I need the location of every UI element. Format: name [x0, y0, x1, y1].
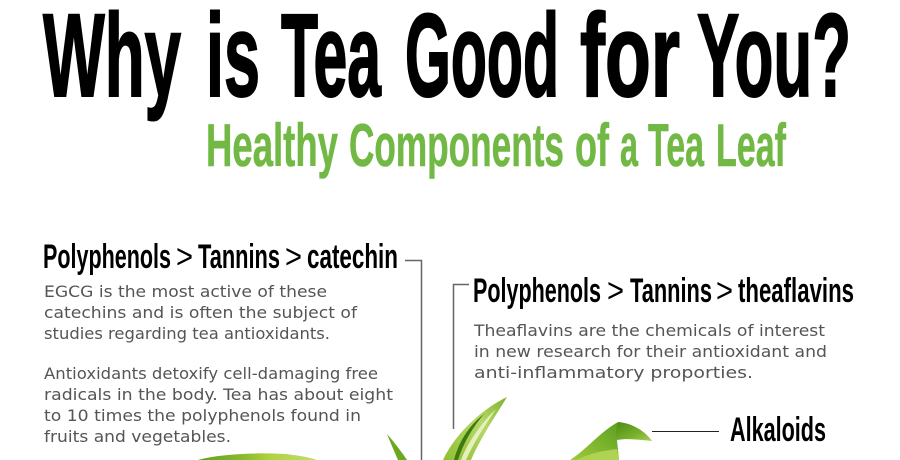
heading: catechin: Polyphenols — [43, 238, 171, 276]
heading: catechin — [43, 238, 398, 276]
text block: catechin description: studies regarding tea antioxidants. — [44, 324, 330, 343]
text block: antioxidants description: radicals in the body. Tea has about eight — [44, 385, 393, 404]
connector: catechin — [405, 260, 422, 460]
text block: catechin description: catechins and is often the subject of — [44, 303, 357, 322]
text block: theaflavins description: Theaflavins are the chemicals of interest — [473, 321, 825, 340]
text block: antioxidants description: to 10 times the polyphenols found in — [44, 406, 361, 425]
heading: theaflavins: > — [716, 272, 733, 310]
subtitle: Components — [349, 112, 564, 179]
connector: alkaloids — [652, 430, 719, 432]
connector: theaflavins — [454, 284, 469, 429]
text block: theaflavins description: in new research for their antioxidant and — [474, 342, 827, 361]
heading: theaflavins: Tannins — [630, 272, 712, 310]
subtitle — [206, 112, 787, 179]
heading: catechin: > — [176, 238, 193, 276]
heading: theaflavins — [473, 272, 854, 310]
subtitle: a — [620, 112, 638, 179]
text block: theaflavins description: anti-inflammatory proporties. — [474, 363, 753, 382]
icon: tea leaves — [198, 397, 652, 460]
text block: catechin description — [44, 282, 357, 343]
leaf: left — [198, 453, 317, 460]
text block: antioxidants description: Antioxidants detoxify cell-damaging free — [44, 364, 378, 383]
subtitle: Leaf — [716, 112, 787, 179]
subtitle: of — [575, 112, 610, 179]
panel: catechin — [43, 238, 398, 446]
subtitle: Tea — [648, 112, 704, 179]
text block: catechin description: EGCG is the most active of these — [44, 282, 327, 301]
text block: theaflavins description — [473, 321, 827, 382]
leaf: narrow left — [387, 434, 407, 460]
leaf: center — [443, 397, 507, 460]
heading: alkaloids: Alkaloids — [730, 411, 826, 449]
panel: theaflavins — [473, 272, 854, 382]
heading: theaflavins: Polyphenols — [473, 272, 601, 310]
text block: antioxidants description: fruits and vegetables. — [44, 427, 231, 446]
subtitle: Healthy — [206, 112, 338, 179]
heading: catechin: catechin — [307, 238, 398, 276]
heading: catechin: Tannins — [198, 238, 280, 276]
heading: theaflavins: > — [607, 272, 624, 310]
heading: catechin: > — [285, 238, 302, 276]
text block: antioxidants description — [44, 364, 393, 446]
leaf: right curl — [570, 422, 652, 460]
title — [43, 0, 851, 122]
